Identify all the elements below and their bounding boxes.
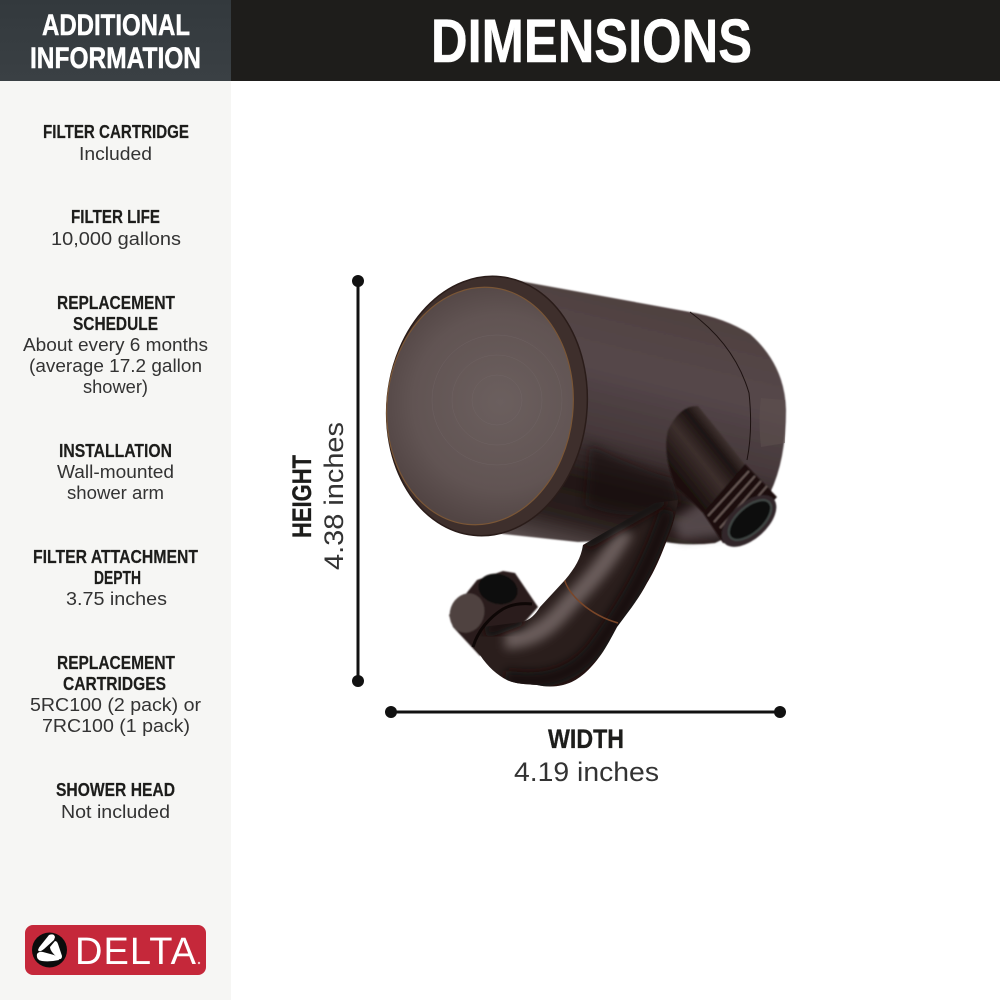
product: shower filter <box>374 266 786 690</box>
spec: filter cartridge: FILTER CARTRIDGE <box>43 122 189 142</box>
spec: installation: shower arm <box>67 483 164 503</box>
label: height 4.38 inches <box>287 422 349 570</box>
spec: replacement cartridges <box>30 653 201 736</box>
spec: filter life: FILTER LIFE <box>71 207 160 227</box>
spec: shower head: SHOWER HEAD <box>56 780 175 800</box>
spec: shower head: Not included <box>61 802 170 822</box>
spec: replacement cartridges: 5RC100 (2 pack) or <box>30 695 201 715</box>
spec: filter attachment depth <box>33 547 198 609</box>
spec: filter attachment depth: FILTER ATTACHMENT <box>33 547 198 567</box>
header: additional information: INFORMATION <box>30 42 201 75</box>
body seam and recess <box>690 312 785 460</box>
label: width 4.19 inches: WIDTH <box>548 724 624 754</box>
spec: filter cartridge <box>43 122 189 164</box>
header: additional information: ADDITIONAL <box>42 9 190 42</box>
panel: additional information sidebar <box>0 81 231 1000</box>
end cap face <box>375 278 585 534</box>
header: additional information <box>0 0 231 81</box>
logo: Delta <box>25 925 206 975</box>
spec: installation: Wall-mounted <box>57 462 174 482</box>
spec: replacement schedule <box>23 293 208 397</box>
hex nut <box>444 569 538 656</box>
spec: filter attachment depth: 3.75 inches <box>66 589 167 609</box>
spec: replacement schedule: (average 17.2 gallon <box>29 356 202 376</box>
spec: replacement cartridges: 7RC100 (1 pack) <box>42 716 190 736</box>
label: width 4.19 inches: 4.19 inches <box>514 757 659 787</box>
spec: replacement schedule: SCHEDULE <box>73 314 158 334</box>
spec: filter cartridge: Included <box>79 144 152 164</box>
label: height 4.38 inches: HEIGHT <box>287 455 317 538</box>
header: dimensions title: DIMENSIONS <box>431 7 752 75</box>
spec: replacement cartridges: CARTRIDGES <box>63 674 166 694</box>
arrow: height dimension line <box>352 275 364 687</box>
spec: filter life <box>51 207 181 249</box>
label: width 4.19 inches <box>514 724 659 787</box>
spec: filter life: 10,000 gallons <box>51 229 181 249</box>
hook arm <box>473 500 678 686</box>
hook collar <box>473 604 532 647</box>
lower right body highlight <box>672 490 725 540</box>
cylinder body <box>440 277 786 544</box>
arrow: width dimension line <box>385 706 786 718</box>
label: height 4.38 inches: 4.38 inches <box>319 422 349 570</box>
outlet nozzle <box>666 406 786 556</box>
dark shadow band <box>585 445 680 515</box>
spec: installation: INSTALLATION <box>59 441 172 461</box>
spec: replacement schedule: shower) <box>83 377 148 397</box>
spec: installation <box>57 441 174 503</box>
spec: replacement schedule: About every 6 months <box>23 335 208 355</box>
spec: shower head <box>56 780 175 822</box>
spec: replacement cartridges: REPLACEMENT <box>57 653 175 673</box>
end cap rim <box>374 266 600 546</box>
header: dimensions title <box>231 0 1000 81</box>
spec: replacement schedule: REPLACEMENT <box>57 293 175 313</box>
logo: Delta: DELTA <box>75 931 197 973</box>
spec: filter attachment depth: DEPTH <box>94 568 141 588</box>
